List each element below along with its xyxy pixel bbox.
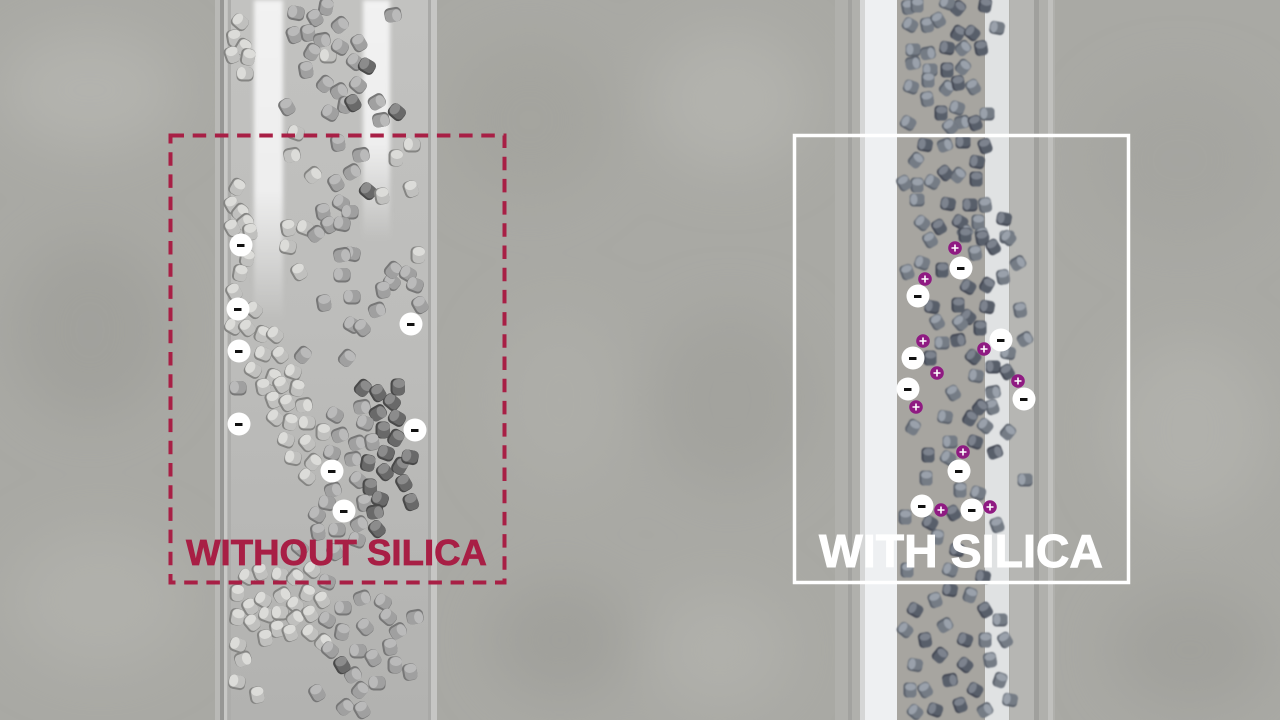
heading: without silica: WITHOUT SILICA [186,532,487,573]
negative charges: left tube [226,234,426,522]
solid frame: with silica [794,136,1128,582]
left glass tube [215,0,437,720]
pellets: right tube [895,0,1035,720]
pellets: left tube [221,0,430,720]
positive charges: right tube [909,241,1025,517]
right glass tube [835,0,1055,720]
heading: with silica: WITH SILICA [819,525,1103,577]
dashed frame: without silica [170,136,504,582]
negative charges: right tube [896,256,1036,522]
